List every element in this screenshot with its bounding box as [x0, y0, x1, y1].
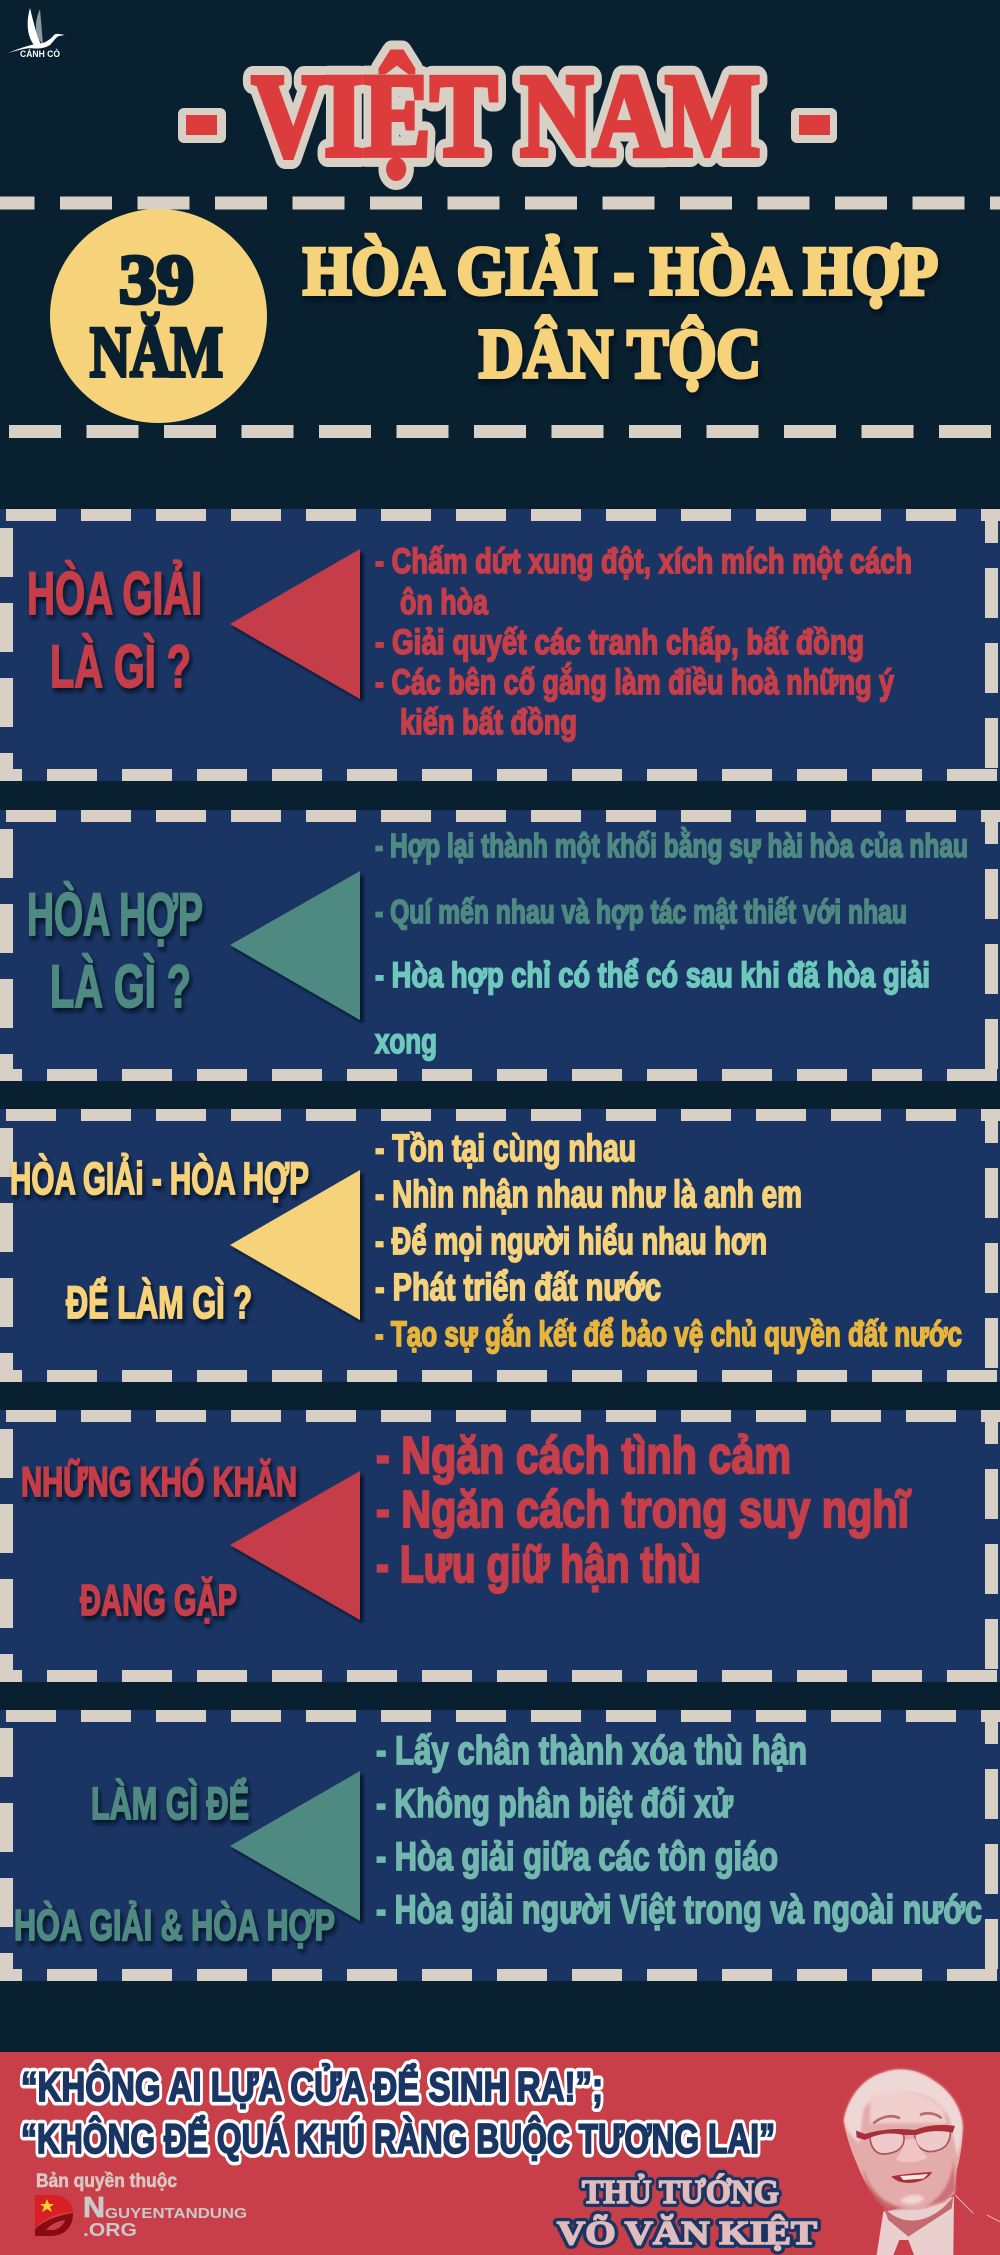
heading: hòa giải hòa hợp để làm gì: ĐỂ LÀM GÌ ?: [66, 1277, 252, 1328]
copyright label: Bản quyền thuộc: [36, 2171, 177, 2192]
arrow: teal triangle: [230, 1771, 360, 1921]
text block: purposes: - Nhìn nhận nhau như là anh em: [375, 1174, 802, 1216]
heading: làm gì để hòa giải và hòa hợp: LÀM GÌ ĐỂ: [91, 1778, 249, 1829]
logo: Nguyentandung.org: .ORG: [83, 2220, 137, 2240]
logo: Nguyentandung.org: N: [83, 2192, 105, 2224]
text block: definition of hòa hợp: [375, 827, 968, 1061]
heading: hòa giải là gì: HÒA GIẢI: [27, 560, 202, 627]
text block: difficulties: - Lưu giữ hận thù: [376, 1536, 701, 1594]
panel: footer quote: [0, 2052, 1000, 2255]
panel: hòa hợp là gì: [0, 810, 1000, 1081]
heading: những khó khăn đang gặp: NHỮNG KHÓ KHĂN: [21, 1457, 297, 1505]
heading: làm gì để hòa giải và hòa hợp: [14, 1778, 335, 1950]
heading: làm gì để hòa giải và hòa hợp: HÒA GIẢI & HÒA HỢP: [14, 1900, 335, 1950]
attribution: thủ tướng võ văn kiệt: VÕ VĂN KIỆT: [557, 2214, 817, 2252]
arrow: teal triangle: [230, 871, 360, 1020]
logo: Nguyentandung.org: [35, 2192, 247, 2240]
text block: purposes: - Để mọi người hiểu nhau hơn: [375, 1221, 767, 1263]
arrow: red triangle: [230, 1471, 360, 1620]
arrow: red triangle: [230, 549, 360, 699]
heading: hòa giải là gì: [27, 560, 202, 700]
title: Việt Nam: VIỆT NAM: [252, 50, 760, 181]
attribution: thủ tướng võ văn kiệt: VÕ VĂN KIỆT: [557, 2214, 817, 2252]
text block: definition of hòa giải: ôn hòa: [400, 583, 488, 622]
quote: “KHÔNG AI LỰA CỬA ĐỂ SINH RA!”;: [21, 2062, 603, 2110]
logo: Cánh Cò bird: [8, 8, 65, 59]
panel: những khó khăn đang gặp: [0, 1410, 1000, 1682]
text block: definition of hòa giải: [375, 542, 912, 742]
portrait: Võ Văn Kiệt: [844, 2069, 1000, 2255]
arrow: yellow triangle: [230, 1170, 360, 1320]
heading: hòa giải hòa hợp dân tộc: HÒA GIẢI - HÒA HỢP: [303, 233, 938, 309]
heading: hòa giải là gì: LÀ GÌ ?: [50, 633, 191, 700]
heading: hòa giải hòa hợp dân tộc: DÂN TỘC: [479, 316, 761, 393]
badge: 39 năm: NĂM: [90, 312, 223, 392]
text block: actions: [376, 1729, 982, 1932]
attribution: thủ tướng võ văn kiệt: [557, 2173, 817, 2252]
quote: [21, 2062, 775, 2162]
text block: purposes: - Phát triển đất nước: [375, 1267, 661, 1309]
logo: Nguyentandung.org: GUYENTANDUNG: [105, 2206, 247, 2222]
text block: difficulties: - Ngăn cách tình cảm: [376, 1427, 791, 1485]
text block: actions: - Không phân biệt đối xử: [376, 1782, 733, 1826]
text block: actions: - Lấy chân thành xóa thù hận: [376, 1729, 807, 1773]
text block: purposes: [375, 1128, 962, 1354]
text block: actions: - Hòa giải giữa các tôn giáo: [376, 1835, 778, 1879]
header band dashed lines: [0, 203, 1000, 432]
heading: hòa hợp là gì: [27, 881, 203, 1020]
quote: “KHÔNG ĐỂ QUÁ KHÚ RÀNG BUỘC TƯƠNG LAI”: [21, 2114, 775, 2162]
panel: làm gì để hòa giải hòa hợp: [0, 1710, 1000, 1981]
heading: hòa giải hòa hợp dân tộc: [303, 233, 938, 393]
attribution: thủ tướng võ văn kiệt: THỦ TƯỚNG: [582, 2173, 779, 2211]
quote: “KHÔNG AI LỰA CỬA ĐỂ SINH RA!”;: [21, 2062, 603, 2110]
text block: definition of hòa giải: - Giải quyết các tranh chấp, bất đồng: [375, 623, 864, 662]
panel: hòa giải là gì: [0, 509, 1000, 781]
heading: những khó khăn đang gặp: [21, 1457, 297, 1625]
title: Việt Nam: VIỆT NAM: [252, 50, 760, 181]
heading: những khó khăn đang gặp: ĐANG GẶP: [80, 1575, 237, 1625]
heading: hòa hợp là gì: HÒA HỢP: [27, 881, 203, 948]
text block: purposes: - Tồn tại cùng nhau: [375, 1128, 636, 1170]
heading: hòa giải hòa hợp để làm gì: [10, 1153, 309, 1328]
heading: hòa giải hòa hợp để làm gì: HÒA GIẢi - HÒA HỢP: [10, 1153, 309, 1204]
text block: difficulties: [376, 1427, 912, 1594]
logo: Cánh Cò bird: CÁNH CÒ: [20, 48, 60, 59]
panel: để làm gì: [0, 1109, 1000, 1382]
attribution: thủ tướng võ văn kiệt: THỦ TƯỚNG: [582, 2173, 779, 2211]
badge: 39 năm: 39: [119, 242, 194, 319]
quote: “KHÔNG ĐỂ QUÁ KHÚ RÀNG BUỘC TƯƠNG LAI”: [21, 2114, 775, 2162]
heading: hòa hợp là gì: LÀ GÌ ?: [50, 953, 191, 1020]
text block: definition of hòa giải: kiến bất đồng: [400, 703, 577, 742]
badge: 39 năm: [50, 209, 267, 423]
text block: definition of hòa hợp: xong: [375, 1022, 437, 1061]
